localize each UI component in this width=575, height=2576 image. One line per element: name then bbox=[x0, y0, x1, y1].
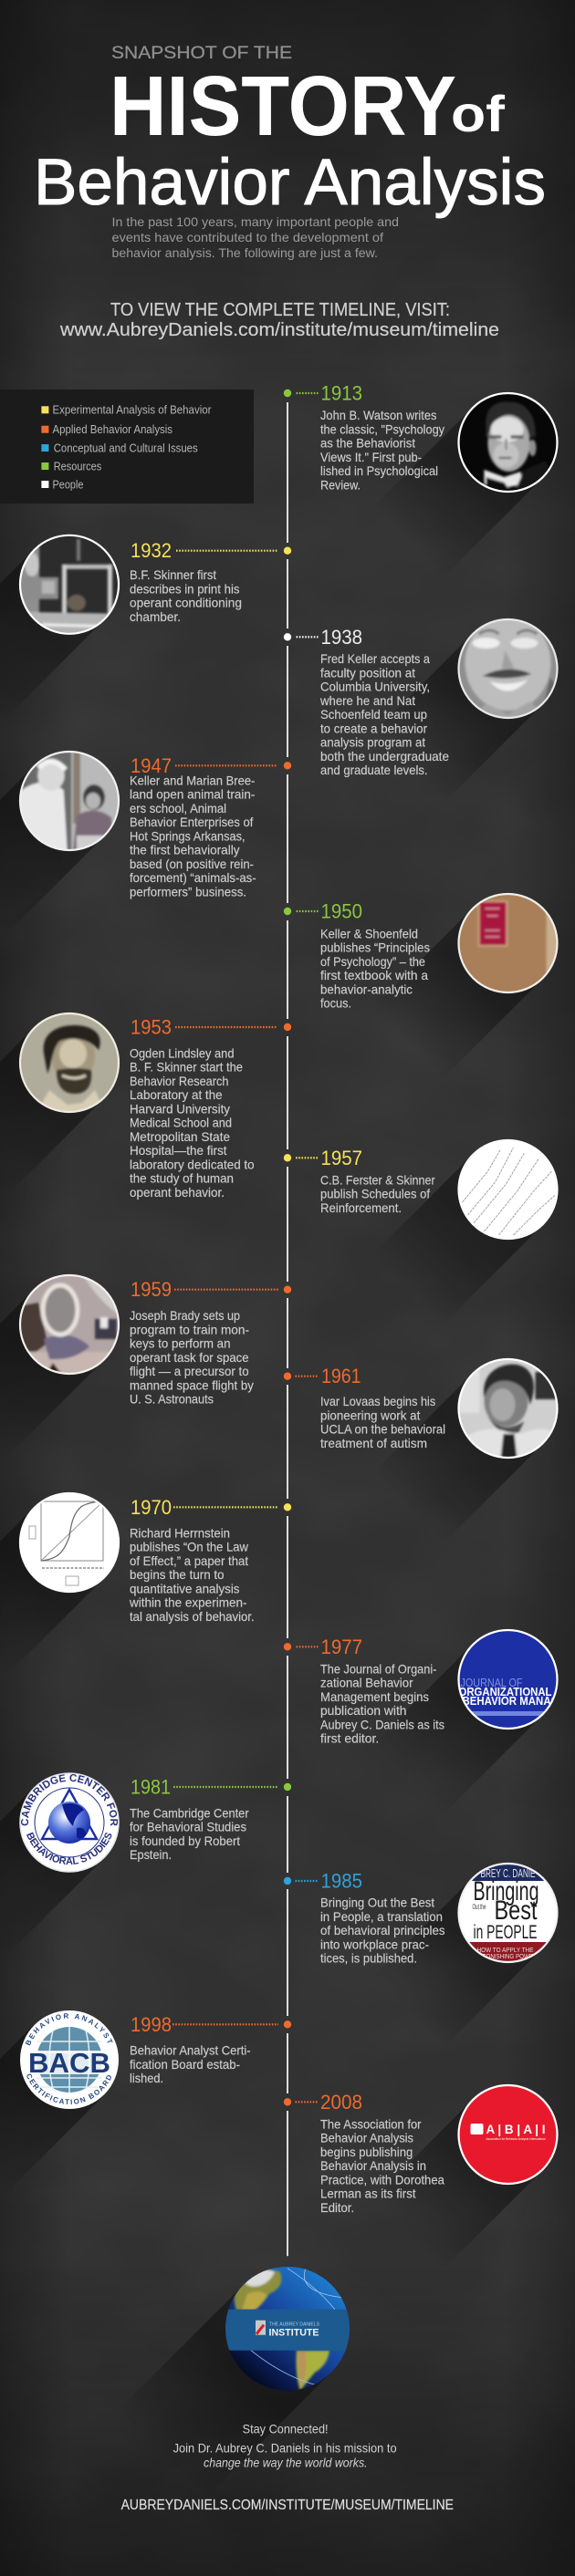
text 2008: Behavior Analysis bbox=[320, 2131, 413, 2145]
text 1970: quantitative analysis bbox=[130, 1581, 239, 1595]
intro paragraph: behavior analysis. The following are just a few. bbox=[111, 245, 378, 260]
marker 1959: 1959 bbox=[131, 1278, 172, 1301]
long shadows behind circles bbox=[0, 407, 543, 2500]
title: history: HISTORY bbox=[110, 58, 456, 153]
text 1970: publishes “On the Law bbox=[130, 1540, 249, 1554]
text 1961 bbox=[320, 1394, 445, 1450]
text 1959: U. S. Astronauts bbox=[130, 1392, 214, 1407]
text 1950: behavior-analytic bbox=[320, 982, 413, 996]
marker 1998: 1998 bbox=[131, 2013, 172, 2036]
text 1947: forcement) “animals-as- bbox=[130, 870, 256, 885]
marker 1932 bbox=[131, 539, 291, 562]
book cover: Bringing Out the Best in People bbox=[458, 1863, 559, 1964]
text 1970: of Effect,” a paper that bbox=[130, 1553, 248, 1568]
event: 1953 bbox=[19, 1013, 291, 1200]
marker 1957: 1957 bbox=[321, 1147, 362, 1169]
text 1981: Epstein. bbox=[130, 1847, 172, 1862]
text 1998: Behavior Analyst Certi- bbox=[130, 2043, 251, 2058]
text 1947: Keller and Marian Bree- bbox=[130, 773, 256, 787]
event: 2008 bbox=[284, 2085, 557, 2215]
title: behavior analysis: Behavior Analysis bbox=[34, 147, 546, 219]
text 1985: tices, is published. bbox=[320, 1951, 417, 1966]
book cover: Bringing Out the Best in People: ASTONISHING POWER bbox=[475, 1954, 537, 1960]
logo: Cambridge Center for Behavioral Studies: BEHAVIORAL STUDIES bbox=[26, 1832, 111, 1864]
text 1950: Keller & Shoenfeld bbox=[320, 926, 418, 940]
event: 1947 bbox=[19, 751, 291, 898]
logo: journal of organizational behavior management bbox=[458, 1629, 559, 1729]
photo: operant conditioning chamber bbox=[19, 535, 120, 635]
text 1913: Review. bbox=[320, 477, 361, 492]
text 1913: John B. Watson writes bbox=[320, 408, 436, 422]
text 1938: Schoenfeld team up bbox=[320, 707, 427, 722]
mission statement: change the way the world works. bbox=[204, 2455, 368, 2469]
text 1981: is founded by Robert bbox=[130, 1833, 240, 1848]
logo: Cambridge Center for Behavioral Studies bbox=[19, 1772, 120, 1873]
legend: applied behavior analysis: Applied Behavior Analysis bbox=[53, 423, 172, 436]
globe: The Aubrey Daniels Institute bbox=[224, 2267, 351, 2391]
text 1913: lished in Psychological bbox=[320, 463, 438, 478]
text 1977: first editor. bbox=[320, 1731, 379, 1746]
marker 1981 bbox=[131, 1775, 291, 1799]
marker 1961 bbox=[284, 1365, 361, 1387]
text 1998 bbox=[130, 2043, 251, 2085]
text 1959: Joseph Brady sets up bbox=[130, 1308, 240, 1323]
text 1950: publishes “Principles bbox=[320, 940, 430, 955]
event: 1970 bbox=[19, 1492, 291, 1624]
text 1932: chamber. bbox=[130, 609, 181, 624]
text 1938: to create a behavior bbox=[320, 721, 427, 735]
text 1981 bbox=[130, 1805, 249, 1862]
legend: resources: Resources bbox=[54, 460, 101, 473]
legend panel bbox=[0, 390, 254, 504]
text 1985: into workplace prac- bbox=[320, 1937, 429, 1952]
text 1957 bbox=[320, 1172, 435, 1215]
text 1947: Hot Springs Arkansas, bbox=[130, 828, 246, 843]
text 1932: B.F. Skinner first bbox=[130, 567, 216, 582]
intro paragraph bbox=[111, 214, 399, 260]
text 1961: UCLA on the behavioral bbox=[320, 1421, 445, 1436]
text 1947 bbox=[130, 773, 256, 898]
text 1950 bbox=[320, 926, 430, 1011]
text 1953: the study of human bbox=[130, 1171, 234, 1186]
event: 1932 bbox=[19, 535, 291, 635]
text 1938: Fred Keller accepts a bbox=[320, 651, 430, 666]
text 1957: publish Schedules of bbox=[320, 1187, 430, 1201]
text 1953: Behavior Research bbox=[130, 1074, 228, 1088]
text 1961: treatment of autism bbox=[320, 1436, 427, 1450]
text 1970: tal analysis of behavior. bbox=[130, 1609, 255, 1624]
marker 1981: 1981 bbox=[131, 1775, 171, 1799]
text 1970: begins the turn to bbox=[130, 1567, 225, 1582]
photo: Ogden Lindsley bbox=[19, 1013, 120, 1113]
institute logo: INSTITUTE bbox=[268, 2328, 319, 2339]
event: 1985 bbox=[284, 1863, 559, 1966]
mission statement bbox=[173, 2441, 397, 2469]
title: of: of bbox=[451, 85, 505, 142]
text 1953: operant behavior. bbox=[130, 1185, 225, 1200]
marker 1970 bbox=[131, 1496, 291, 1519]
marker 1953 bbox=[131, 1016, 291, 1038]
call to action: www.AubreyDaniels.com/institute/museum/timeline bbox=[59, 320, 499, 340]
text 1961: pioneering work at bbox=[320, 1407, 420, 1422]
text 1981: for Behavioral Studies bbox=[130, 1820, 246, 1834]
intro paragraph: In the past 100 years, many important people and bbox=[111, 214, 399, 229]
stay connected: Stay Connected! bbox=[243, 2422, 329, 2436]
institute logo: THE AUBREY DANIELS bbox=[269, 2322, 320, 2328]
text 2008 bbox=[320, 2116, 444, 2215]
text 1938: and graduate levels. bbox=[320, 763, 427, 777]
text 1947: the first behaviorally bbox=[130, 843, 239, 857]
text 1985 bbox=[320, 1896, 445, 1966]
header bbox=[34, 43, 546, 340]
chart: matching law plot bbox=[19, 1492, 120, 1593]
text 1977: Management begins bbox=[320, 1689, 429, 1704]
text 1998: fication Board estab- bbox=[130, 2057, 240, 2072]
photo: Keller and Marian Breland bbox=[19, 751, 120, 852]
text 1959: operant task for space bbox=[130, 1350, 249, 1365]
logo: ABAI bbox=[458, 2085, 557, 2184]
text 1953: laboratory dedicated to bbox=[130, 1157, 255, 1171]
text 1985: in People, a translation bbox=[320, 1909, 443, 1924]
text 2008: begins publishing bbox=[320, 2145, 413, 2159]
text 1953: B. F. Skinner start the bbox=[130, 1060, 243, 1075]
text 1985: of behavioral principles bbox=[320, 1923, 445, 1937]
text 1947: Behavior Enterprises of bbox=[130, 815, 253, 829]
timeline spine bbox=[287, 402, 288, 2256]
text 1977: Aubrey C. Daniels as its bbox=[320, 1717, 444, 1731]
legend: experimental analysis of behavior: Experimental Analysis of Behavior bbox=[53, 403, 212, 416]
text 1970 bbox=[129, 1525, 255, 1624]
photo: space capsule bbox=[19, 1274, 120, 1376]
text 1961: Ivar Lovaas begins his bbox=[320, 1394, 435, 1408]
text 1959: manned space flight by bbox=[130, 1377, 254, 1392]
text 1938: analysis program at bbox=[320, 735, 425, 750]
text 1953: Ogden Lindsley and bbox=[130, 1045, 234, 1060]
text 1938: where he and Nat bbox=[319, 693, 415, 708]
marker 1977: 1977 bbox=[321, 1636, 362, 1658]
event: 1981 bbox=[19, 1772, 292, 1873]
book cover: Bringing Out the Best in People: HOW TO APPLY THE bbox=[476, 1948, 534, 1954]
text 2008: Behavior Analysis in bbox=[320, 2158, 426, 2173]
marker 1913 bbox=[284, 381, 362, 405]
event: 1957 bbox=[284, 1139, 559, 1240]
text 1938: Columbia University, bbox=[320, 679, 430, 693]
marker 1970: 1970 bbox=[131, 1496, 172, 1519]
text 1977 bbox=[320, 1661, 444, 1746]
mission statement: Join Dr. Aubrey C. Daniels in his mission to bbox=[173, 2441, 397, 2456]
text 1947: based (on positive rein- bbox=[130, 857, 254, 871]
text 1981: The Cambridge Center bbox=[130, 1805, 249, 1820]
text 1959 bbox=[130, 1308, 254, 1407]
logo: BACB: BACB bbox=[28, 2047, 110, 2079]
text 1959: keys to perform an bbox=[130, 1335, 230, 1350]
book cover: Bringing Out the Best in People: in PEOPLE bbox=[473, 1922, 537, 1943]
text 1932: describes in print his bbox=[130, 581, 239, 596]
text 1913: Views It." First pub- bbox=[320, 450, 422, 464]
text 1970: Richard Herrnstein bbox=[130, 1525, 230, 1540]
logo: BACB: BEHAVIOR ANALYST bbox=[26, 2013, 113, 2045]
text 1957: Reinforcement. bbox=[320, 1200, 402, 1215]
text 1950: first textbook with a bbox=[320, 968, 428, 982]
marker 1998 bbox=[131, 2013, 291, 2036]
text 1938: faculty position at bbox=[320, 665, 415, 680]
text 1938 bbox=[319, 651, 449, 777]
text 1977: The Journal of Organi- bbox=[320, 1661, 437, 1676]
text 1947: land open animal train- bbox=[130, 787, 256, 802]
photo: Fred Keller bbox=[458, 616, 559, 719]
event: 1977 bbox=[284, 1629, 559, 1746]
logo: journal of organizational behavior management: BEHAVIOR MANAG bbox=[462, 1694, 559, 1708]
text 1950: of Psychology” – the bbox=[320, 954, 425, 969]
marker 2008: 2008 bbox=[320, 2091, 362, 2114]
text 1959: program to train mon- bbox=[130, 1322, 249, 1336]
text 1998: lished. bbox=[130, 2071, 163, 2085]
marker 1950: 1950 bbox=[321, 899, 362, 923]
event: 1913 bbox=[284, 381, 559, 493]
marker 1932: 1932 bbox=[131, 539, 172, 562]
marker 1947: 1947 bbox=[131, 754, 172, 777]
book cover: Bringing Out the Best in People: Best bbox=[495, 1896, 538, 1926]
text 1950: focus. bbox=[320, 996, 351, 1011]
text 1953: Laboratory at the bbox=[130, 1087, 223, 1102]
logo: ABAI: A | B | A | I bbox=[486, 2122, 546, 2136]
photo: textbook cover bbox=[458, 893, 559, 993]
marker 1947 bbox=[131, 754, 291, 777]
marker 1938: 1938 bbox=[321, 626, 362, 649]
intro paragraph: events have contributed to the development of bbox=[111, 230, 383, 244]
call to action bbox=[59, 300, 499, 340]
book cover: Bringing Out the Best in People: Out the bbox=[473, 1903, 486, 1911]
photo: John B. Watson bbox=[458, 392, 559, 493]
photo: Ivar Lovaas bbox=[458, 1358, 559, 1459]
text 1953: Hospital—the first bbox=[130, 1143, 227, 1158]
text 1932 bbox=[130, 567, 242, 624]
text 1977: publication with bbox=[320, 1703, 407, 1718]
text 1953: Metropolitan State bbox=[130, 1129, 230, 1144]
book cover: Bringing Out the Best in People: Bringing bbox=[473, 1876, 538, 1906]
marker 1953: 1953 bbox=[131, 1016, 172, 1038]
text 1932: operant conditioning bbox=[130, 595, 242, 609]
marker 1950 bbox=[284, 899, 362, 923]
kicker: snapshot of the: SNAPSHOT OF THE bbox=[111, 43, 292, 63]
logo: BACB: CERTIFICATION BOARD bbox=[26, 2074, 111, 2104]
marker 1913: 1913 bbox=[321, 381, 362, 405]
footer bbox=[121, 2422, 454, 2513]
text 1947: ers school, Animal bbox=[130, 801, 226, 815]
text 1953 bbox=[130, 1045, 255, 1200]
book cover: Bringing Out the Best in People: BREY C. DANIE bbox=[480, 1866, 536, 1880]
event: 1950 bbox=[284, 893, 559, 1011]
footer url: AUBREYDANIELS.COM/INSTITUTE/MUSEUM/TIMELINE bbox=[121, 2498, 454, 2513]
call to action: TO VIEW THE COMPLETE TIMELINE, VISIT: bbox=[110, 300, 450, 320]
marker 1938 bbox=[284, 626, 362, 649]
marker 1985: 1985 bbox=[321, 1870, 362, 1892]
photo: cumulative records bbox=[458, 1139, 559, 1240]
marker 1977 bbox=[284, 1636, 362, 1658]
marker 2008 bbox=[284, 2091, 362, 2114]
text 2008: The Association for bbox=[320, 2116, 422, 2131]
logo: Cambridge Center for Behavioral Studies: CAMBRIDGE CENTER FOR bbox=[21, 1774, 118, 1826]
logo: journal of organizational behavior management: ORGANIZATIONAL bbox=[458, 1685, 552, 1698]
legend: conceptual and cultural issues: Conceptual and Cultural Issues bbox=[54, 441, 198, 454]
text 1985: Bringing Out the Best bbox=[320, 1896, 434, 1910]
text 1913: as the Behaviorist bbox=[320, 436, 415, 451]
event: 1998 bbox=[20, 2010, 292, 2109]
text 2008: Editor. bbox=[320, 2200, 354, 2215]
text 1959: flight — a precursor to bbox=[130, 1364, 249, 1378]
event: 1938 bbox=[284, 616, 559, 777]
marker 1961: 1961 bbox=[321, 1365, 361, 1387]
logo: ABAI: Association for Behavior Analysis International bbox=[486, 2137, 546, 2141]
legend: people bbox=[41, 478, 84, 491]
text 1970: within the experimen- bbox=[129, 1595, 247, 1610]
text 1957: C.B. Ferster & Skinner bbox=[320, 1172, 435, 1187]
text 1953: Medical School and bbox=[130, 1116, 232, 1130]
institute logo bbox=[256, 2321, 320, 2339]
text 1913: the classic, "Psychology bbox=[320, 421, 444, 436]
marker 1957 bbox=[284, 1147, 362, 1169]
text 1913 bbox=[320, 408, 444, 492]
marker 1959 bbox=[131, 1278, 291, 1301]
event: 1961 bbox=[284, 1358, 559, 1459]
text 2008: Lerman as its first bbox=[320, 2186, 416, 2201]
text 2008: Practice, with Dorothea bbox=[320, 2172, 444, 2186]
text 1947: performers” business. bbox=[130, 884, 246, 898]
text 1977: zational Behavior bbox=[320, 1676, 413, 1690]
text 1938: both the undergraduate bbox=[320, 749, 449, 763]
marker 1985 bbox=[284, 1870, 362, 1892]
logo: journal of organizational behavior management: JOURNAL OF bbox=[460, 1676, 523, 1689]
legend: people: People bbox=[53, 478, 84, 491]
text 1953: Harvard University bbox=[130, 1101, 230, 1116]
logo: BACB bbox=[20, 2010, 119, 2109]
event: 1959 bbox=[19, 1274, 291, 1407]
